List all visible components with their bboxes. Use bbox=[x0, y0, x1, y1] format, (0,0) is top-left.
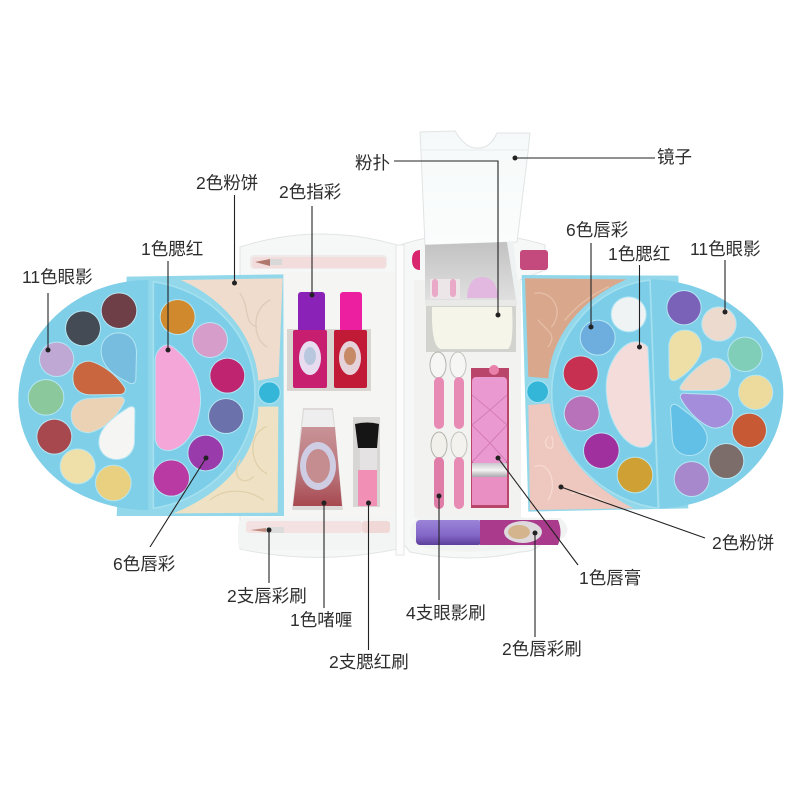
label: 11色眼影 left bbox=[22, 267, 93, 352]
panel: mirror bbox=[420, 131, 530, 245]
item: nail polish recess bbox=[287, 329, 371, 391]
label: 镜子 bbox=[512, 147, 692, 167]
left palette eye shadows bbox=[29, 293, 136, 500]
label: 1色唇膏: 1色唇膏 bbox=[579, 568, 641, 588]
label: 2色唇彩刷: 2色唇彩刷 bbox=[502, 639, 582, 659]
label: 2支唇彩刷: 2支唇彩刷 bbox=[227, 586, 307, 606]
label: 11色眼影 right bbox=[690, 239, 761, 314]
label: 1色腮红 left bbox=[141, 239, 203, 352]
item: gel bottle bbox=[292, 408, 343, 510]
label: 6色唇彩 left: 6色唇彩 bbox=[113, 554, 175, 574]
label: 1色腮红 right: 1色腮红 bbox=[608, 244, 670, 264]
label: 2色唇彩刷 bbox=[502, 530, 582, 659]
label: 1色啫喱: 1色啫喱 bbox=[290, 610, 352, 630]
label: 4支眼影刷: 4支眼影刷 bbox=[406, 603, 486, 623]
item: bottom lip brush bbox=[246, 521, 390, 533]
item: four eye shadow brushes bbox=[430, 352, 467, 509]
label: 2色指彩: 2色指彩 bbox=[279, 182, 341, 202]
item: top lip brush bbox=[252, 257, 386, 268]
label: 6色唇彩 left bbox=[113, 456, 208, 574]
panel: white right case bbox=[396, 234, 548, 558]
item: lip gloss tube bbox=[410, 517, 568, 552]
label: 2色粉饼 right: 2色粉饼 bbox=[712, 533, 774, 553]
label: 1色唇膏 bbox=[496, 456, 641, 588]
item: powder puff bbox=[426, 300, 516, 352]
panel: left palette bbox=[18, 274, 284, 516]
label: 2色指彩 bbox=[279, 182, 341, 298]
left palette lip colours and blush bbox=[154, 300, 244, 496]
label: 6色唇彩 right: 6色唇彩 bbox=[566, 220, 628, 240]
label: 2色粉饼 top bbox=[196, 173, 258, 286]
item: lipstick bbox=[471, 365, 509, 508]
label: 1色腮红 left: 1色腮红 bbox=[141, 239, 203, 259]
label: 6色唇彩 right bbox=[566, 220, 628, 330]
panel: mirror tray bbox=[425, 241, 520, 306]
right palette eye shadows bbox=[667, 291, 772, 496]
item: pink lipstick peeking left of mirror bbox=[412, 250, 420, 270]
right palette lip colours and blush bbox=[564, 297, 652, 492]
label: 4支眼影刷 bbox=[406, 494, 486, 623]
label: 2支腮红刷: 2支腮红刷 bbox=[329, 652, 409, 672]
label: 2色粉饼 top: 2色粉饼 bbox=[196, 173, 258, 193]
label: 2色粉饼 right bbox=[558, 484, 774, 553]
label: 2支唇彩刷 bbox=[227, 528, 307, 606]
label: 2支腮红刷 bbox=[329, 500, 409, 672]
item: red nail polish bbox=[334, 292, 367, 388]
panel: right palette bbox=[522, 275, 783, 512]
item: purple nail polish bbox=[293, 292, 327, 388]
item: gloss peeking right of mirror bbox=[520, 250, 548, 270]
label: 11色眼影 right: 11色眼影 bbox=[690, 239, 761, 259]
label: 11色眼影 left: 11色眼影 bbox=[22, 267, 93, 287]
label: 1色腮红 right bbox=[608, 244, 670, 350]
label: 镜子: 镜子 bbox=[657, 147, 692, 167]
label: 粉扑 bbox=[355, 153, 500, 318]
label: 1色啫喱 bbox=[290, 500, 352, 630]
panel: white left case bbox=[238, 234, 397, 557]
label: 粉扑: 粉扑 bbox=[355, 153, 390, 173]
item: blush brush bbox=[353, 417, 380, 507]
